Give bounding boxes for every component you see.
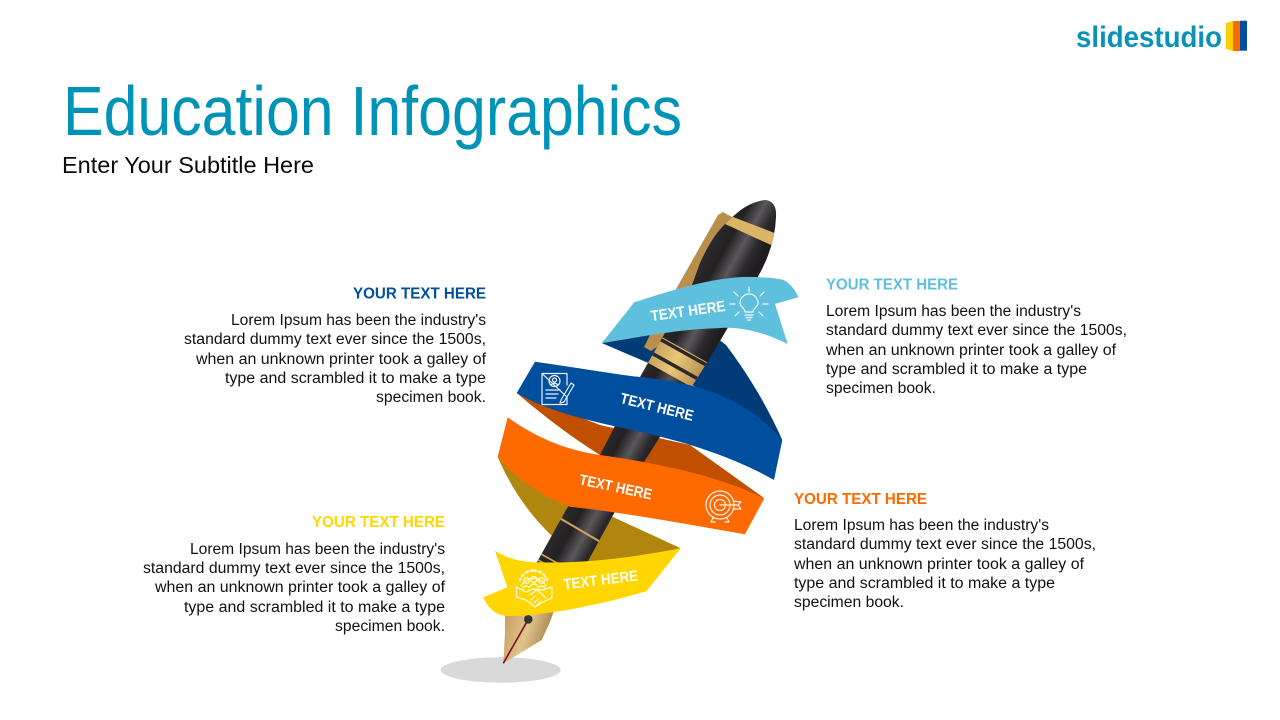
ribbon: yellow	[483, 548, 681, 616]
text block: yellow: when an unknown printer took a galley of	[154, 579, 446, 596]
title: Education Infographics	[63, 72, 682, 150]
pen clip	[644, 212, 734, 351]
text block: light blue: standard dummy text ever since the 1500s,	[826, 322, 1127, 339]
icon: target with arrow	[706, 491, 741, 522]
text block: dark blue: specimen book.	[376, 389, 486, 406]
ribbon: dark blue	[517, 362, 782, 480]
label: text here light blue: TEXT HERE	[650, 298, 726, 325]
text block: orange: specimen book.	[794, 594, 904, 611]
text block: yellow: specimen book.	[335, 618, 445, 635]
icon: document and pencil	[542, 374, 574, 404]
text block: dark blue: standard dummy text ever since the 1500s,	[184, 331, 486, 348]
text block: yellow: Lorem Ipsum has been the industry's	[190, 541, 445, 558]
ribbon: light blue	[602, 277, 798, 344]
text block: orange: standard dummy text ever since the 1500s,	[794, 536, 1096, 553]
text block: yellow: YOUR TEXT HERE	[312, 514, 445, 531]
text block: yellow	[143, 514, 446, 635]
ribbon: orange	[498, 417, 764, 534]
text block: dark blue: YOUR TEXT HERE	[353, 286, 486, 302]
icon: handshake and gear	[516, 570, 552, 607]
text block: dark blue: when an unknown printer took a galley of	[195, 351, 487, 368]
ribbon fold: dark blue	[602, 325, 782, 440]
text block: light blue: specimen book.	[826, 380, 936, 397]
label: text here yellow: TEXT HERE	[563, 567, 639, 594]
text block: dark blue: type and scrambled it to make a type	[225, 370, 486, 387]
text block: light blue: type and scrambled it to make a type	[826, 361, 1087, 378]
text block: orange: type and scrambled it to make a type	[794, 575, 1055, 592]
logo: slidestudio	[1076, 21, 1222, 54]
text block: orange: YOUR TEXT HERE	[794, 491, 927, 508]
ribbon fold: dark orange	[517, 393, 764, 498]
pen shadow	[441, 657, 561, 683]
text block: dark blue	[184, 286, 487, 406]
ribbon fold: dark gold	[498, 457, 681, 565]
text block: light blue: Lorem Ipsum has been the industry's	[826, 303, 1081, 320]
text block: orange: when an unknown printer took a galley of	[793, 556, 1085, 573]
text block: light blue: YOUR TEXT HERE	[826, 276, 958, 294]
text block: dark blue: Lorem Ipsum has been the industry's	[231, 312, 486, 329]
text block: yellow: type and scrambled it to make a type	[184, 599, 445, 616]
text block: light blue	[825, 276, 1127, 397]
icon: light bulb	[730, 287, 768, 320]
pen body	[536, 200, 776, 562]
pen nib	[503, 608, 555, 663]
label: text here orange: TEXT HERE	[578, 471, 654, 503]
text block: light blue: when an unknown printer took a galley of	[825, 342, 1117, 359]
text block: orange: Lorem Ipsum has been the industry's	[794, 517, 1049, 534]
text block: yellow: standard dummy text ever since the 1500s,	[143, 560, 445, 577]
label: text here dark blue: TEXT HERE	[618, 390, 695, 425]
subtitle: Enter Your Subtitle Here	[62, 152, 314, 178]
text block: orange	[793, 491, 1096, 611]
